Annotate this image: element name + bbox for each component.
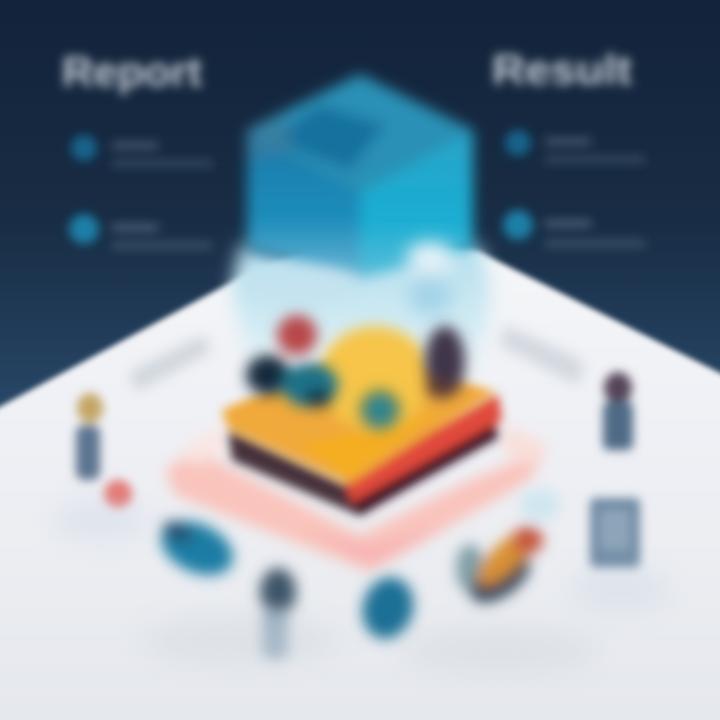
cloud highlights	[240, 242, 454, 315]
figure: left person	[76, 393, 132, 508]
heading: left: Report	[62, 48, 202, 95]
yellow dome	[319, 326, 431, 430]
glass cube lower	[232, 245, 490, 390]
left list	[69, 135, 212, 249]
right list	[503, 130, 645, 247]
heading: right: Result	[492, 46, 632, 93]
figure: right lower device	[590, 498, 640, 568]
icon: blue oval left	[152, 510, 242, 586]
callout labels on floor	[130, 325, 585, 392]
pink ribbon path	[165, 425, 550, 572]
objects on platform	[246, 315, 465, 431]
panel: white floor	[0, 230, 720, 720]
icon: colourful chart	[456, 489, 560, 612]
figure: right upper person	[603, 372, 633, 450]
figure: bottom person	[260, 568, 296, 658]
cube: blue box	[247, 74, 473, 280]
soft shadows on floor	[50, 500, 670, 674]
platform: layered stack	[222, 350, 502, 516]
icon: bottom teal circle	[356, 572, 420, 644]
